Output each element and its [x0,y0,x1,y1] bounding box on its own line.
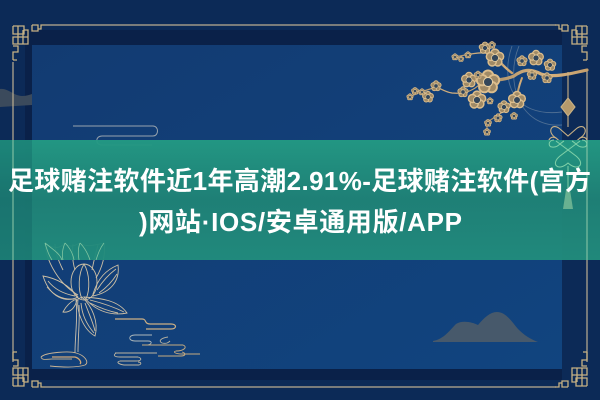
small left petal [63,299,77,312]
strip shading inside band [0,140,32,260]
upper petals [45,243,105,295]
corner knot: bottom right [555,352,587,387]
tassel seen through band [563,190,573,209]
water ripple lines [114,319,200,365]
centre bud [71,264,97,300]
faint arcs behind branch [508,46,562,125]
right upper petal [93,265,118,296]
pendant knot seen through band [549,140,587,190]
stem [75,300,79,353]
hanging knot pendant [549,72,587,190]
paper-clip cloud line [73,126,158,145]
lotus top seen through band [45,243,104,260]
frame lines through band [13,140,587,260]
corner knot: top right [555,25,587,60]
pendant diamond [561,98,575,116]
left petal [43,276,78,299]
lotus flower [41,243,127,367]
title line 2: )网站·IOS/安卓通用版/APP [139,207,462,237]
teal title band [0,140,600,260]
corner knot: bottom left [13,352,45,387]
blossoms [486,49,504,66]
lily pad [41,352,87,367]
grey mountain [433,312,538,342]
right lower petal [84,297,127,314]
pendant knot [551,127,585,167]
corner knot: top left [13,25,45,60]
pendant tassel [564,190,572,209]
inner panel shadow [25,30,562,380]
pendant cord [567,72,569,190]
plum blossom branch [407,41,587,135]
lower petal [78,297,96,336]
left grey hill fragment [0,89,32,107]
title [8,166,591,237]
branches [410,53,587,132]
inner blue panel [32,45,562,369]
title line 1: 足球赌注软件近1年高潮2.91%-足球赌注软件(宫方 [8,166,591,196]
